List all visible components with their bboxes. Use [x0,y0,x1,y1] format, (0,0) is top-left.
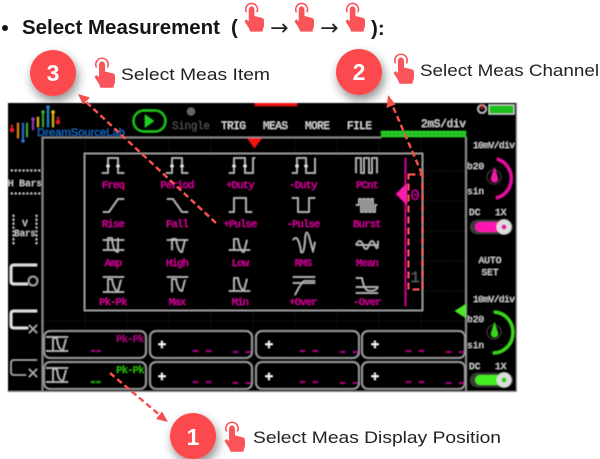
row 1 items: +Duty [226,180,254,192]
title: Select Measurement: ( [231,16,238,39]
top menu: FILE [347,121,372,133]
row 4 items: Max [169,297,186,309]
row 2 items [102,198,381,231]
measurement display row 1: + [158,336,166,352]
row 2 items: Burst [353,219,381,231]
panel: measurement item menu [84,154,422,310]
right channel panel: SET [481,267,499,278]
battery [478,104,514,114]
left side buttons: V [22,219,28,229]
row 3 items: Low [232,258,250,270]
callout 3: Select Meas Item: Select Meas Item [121,65,270,84]
right channel panel: 10mV/div [473,140,515,151]
measurement display row 2: Pk-Pk [116,365,144,377]
top menu: MORE [305,121,330,133]
right channel panel: sin [467,186,484,197]
title: Select Measurement: → [320,16,338,41]
top menu: 2mS/div [421,119,466,131]
callout 2: Select Meas Channel: 2 [353,59,365,85]
measurement display row 1: Pk-Pk [116,334,144,346]
icon: hand 3 in title [345,3,365,32]
row 2 items: Rise [102,219,124,231]
right channel panel: 1X [495,207,507,218]
callout 2: Select Meas Channel: Select Meas Channel [420,61,599,80]
channel selector: 1 [410,269,420,287]
top menu [172,108,466,133]
row 4 items: Pk-Pk [99,297,127,309]
row 1 items [102,158,378,192]
callout 2: Select Meas Channel [336,49,599,95]
trigger marker [247,138,262,148]
logo: DreamSourceLab [10,106,125,142]
grid [8,104,516,392]
measurement display row 2: + [265,368,273,384]
row 2 items: +Pulse [223,219,257,231]
measurement display row 1: + [371,336,379,352]
row 3 items: RMS [295,258,312,270]
row 4 items: Min [232,297,249,309]
title: Select Measurement: ): [371,17,385,40]
top menu: TRIG [221,121,246,133]
icon: hand 2 in title [294,3,314,32]
measurement display row 2 [44,362,465,389]
title: Select Measurement: Select Measurement [22,16,220,39]
icon: hand 1 in title [244,3,264,32]
play button [134,110,166,132]
row 3 items: Mean [356,258,378,270]
row 1 items: -Duty [289,180,317,192]
oscilloscope screen [8,103,517,392]
highlight: channel dashed box [408,174,422,290]
right channel panel: DC [469,207,481,218]
callout 3: Select Meas Item [30,50,270,96]
row 1 items: PCnt [356,180,378,192]
left side buttons: H Bars [8,178,42,189]
title: Select Measurement [2,3,385,41]
top menu: MEAS [263,121,288,133]
callout 1: Select Meas Display Position: Select Meas Display Position [253,428,501,447]
row 1 items: Freq [102,180,124,192]
row 4 items: +Over [289,297,317,309]
logo: DreamSourceLab: DreamSourceLab [37,127,125,139]
row 2 items: Fall [166,219,188,231]
left side buttons: Bars [14,229,36,239]
right channel panel: 10mV/div [473,294,515,305]
right channel panel [455,140,515,388]
row 3 items: Amp [105,258,122,270]
channel selector [396,158,420,306]
right channel panel: b20 [467,161,484,172]
row 3 items [103,232,378,270]
channel selector: 0 [410,187,420,205]
right channel panel: 1X [495,361,507,372]
row 3 items: High [166,258,188,270]
row 4 items: -Over [353,297,381,309]
callout 1: Select Meas Display Position [170,413,501,459]
right channel panel: sin [467,340,484,351]
left side buttons [8,170,42,377]
arrow: to step 2 [386,95,422,174]
measurement display row 2: + [371,368,379,384]
callout 1: Select Meas Display Position: 1 [187,424,200,450]
right channel panel: b20 [467,314,484,325]
arrow: to step 1 [110,373,168,422]
arrow: to step 3 [78,94,216,223]
right channel panel: DC [469,361,481,372]
row 2 items: -Pulse [286,219,320,231]
row 1 items: Period [160,180,194,192]
measurement display row 1: + [265,336,273,352]
measurement display row 1 [44,331,465,358]
measurement display row 2: + [158,368,166,384]
title: Select Measurement: → [270,16,288,41]
right channel panel: AUTO [479,255,502,266]
top menu: Single [172,121,210,133]
callout 3: Select Meas Item: 3 [47,60,59,86]
row 4 items [99,277,381,309]
